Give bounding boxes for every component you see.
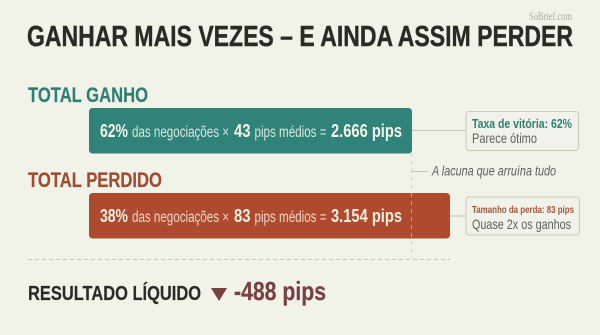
callout: taxa de vitória — [466, 112, 578, 150]
icon: down triangle — [211, 288, 227, 301]
panel: total ganho bar — [89, 108, 412, 154]
panel: total ganho bar: 2.666 pips — [331, 121, 402, 141]
callout: tamanho da perda — [466, 197, 580, 235]
panel: total perdido bar: das negociações × — [132, 209, 229, 226]
callout: tamanho da perda: Quase 2x os ganhos — [472, 216, 571, 232]
net result — [28, 276, 326, 306]
panel: total perdido bar: 3.154 pips — [331, 206, 402, 226]
panel: total perdido bar — [89, 193, 450, 238]
panel: total perdido bar: pips médios = — [254, 209, 326, 226]
callout: taxa de vitória: Taxa de vitória: 62% — [472, 116, 572, 131]
net result: RESULTADO LÍQUIDO — [28, 282, 201, 305]
panel: total perdido bar: 83 — [234, 206, 250, 226]
panel: total ganho bar: das negociações × — [132, 124, 229, 141]
watermark: SoBrief.com — [529, 9, 572, 23]
connector: gap dashed line — [410, 153, 412, 258]
net result: -488 pips — [234, 276, 326, 306]
panel: total ganho bar: 62% — [100, 121, 128, 141]
connector: win bar to callout — [412, 130, 466, 132]
panel: total ganho bar: 43 — [234, 121, 250, 141]
heading: total ganho: TOTAL GANHO — [28, 84, 148, 107]
annotation: a lacuna: A lacuna que arruína tudo — [431, 164, 556, 178]
callout: taxa de vitória: Parece ótimo — [472, 130, 537, 146]
heading: total perdido: TOTAL PERDIDO — [28, 169, 162, 192]
connector: loss bar to callout — [450, 215, 466, 217]
panel: total ganho bar: pips médios = — [254, 124, 326, 141]
panel: total perdido bar: 38% — [100, 206, 128, 226]
